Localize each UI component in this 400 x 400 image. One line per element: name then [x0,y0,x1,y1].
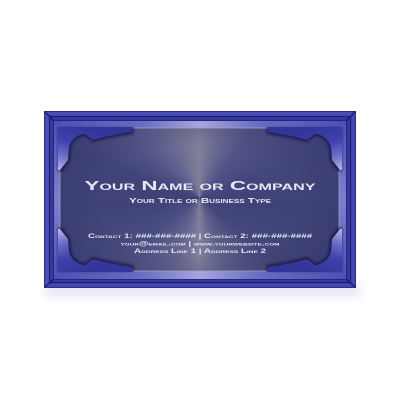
card background [44,111,356,288]
corner ornament: bottom right [267,229,342,272]
corner ornament: top left [58,127,133,170]
subtitle: title or business type: Your Title or Business Type [129,196,272,205]
email and website line: your@email.com | www.yourwebsite.com [120,242,281,248]
heading: name or company: Your Name or Company [84,179,316,193]
card shadow [46,284,360,296]
corner ornament: top right [267,127,342,170]
corner ornament: bottom left [58,229,133,272]
contact line: Contact 1: ###-###-#### | Contact 2: ###-###-#### [88,234,313,240]
ornamental frame [44,112,356,288]
corner shadows [58,128,342,271]
address line: Address Line 1 | Address Line 2 [134,249,267,255]
centre panel with radial metallic sheen [60,128,339,271]
